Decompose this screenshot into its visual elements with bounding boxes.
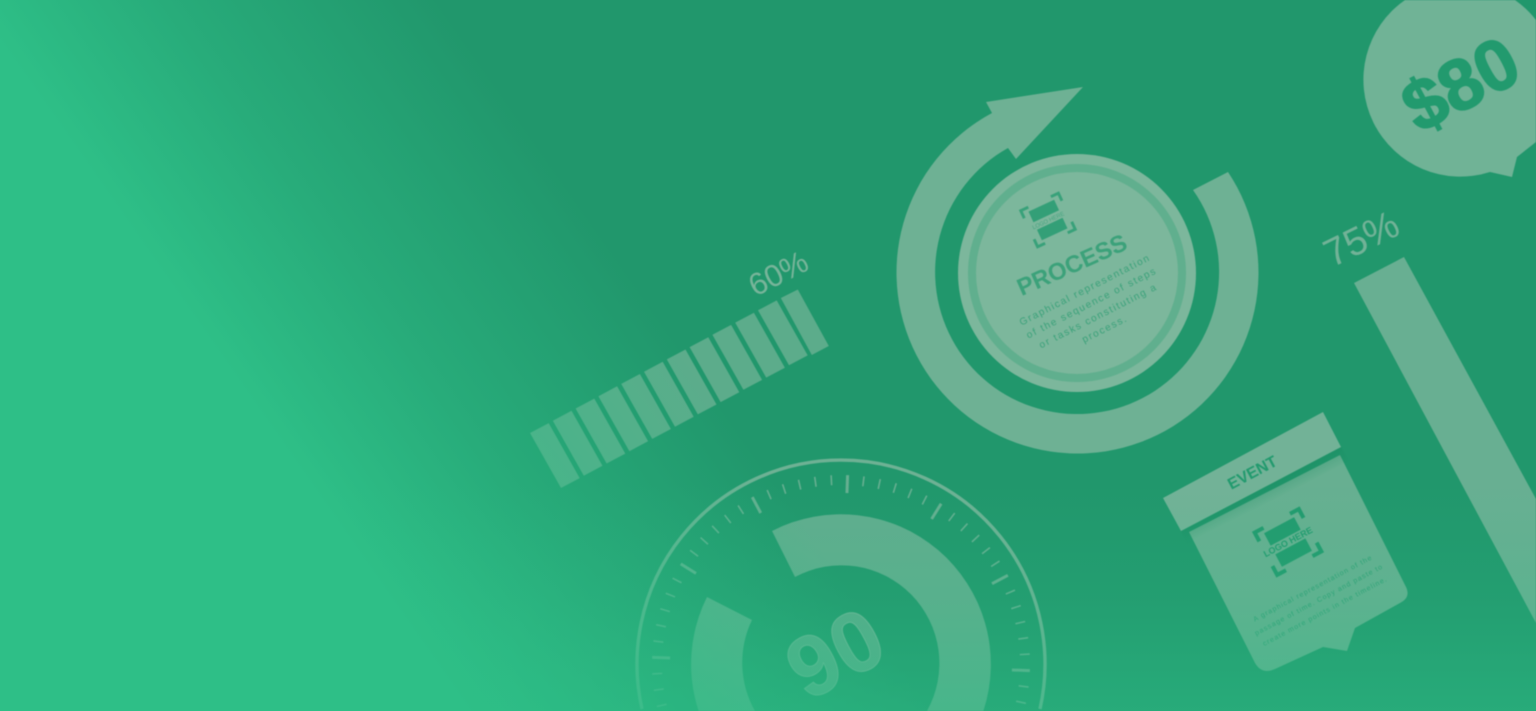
process description: process. xyxy=(1080,313,1130,346)
process description: or tasks constituting a xyxy=(1038,282,1159,351)
label: 60%: 60% xyxy=(743,244,814,303)
icon: event logo: LOGO HERE xyxy=(1262,525,1314,559)
icon: process logo: LOGO HERE xyxy=(1032,211,1066,231)
event description: passage of time. Copy and paste to xyxy=(1254,564,1385,637)
event description: A graphical representation of the xyxy=(1252,554,1374,623)
event description: create more points in the timeline. xyxy=(1262,576,1389,648)
icon: process logo xyxy=(1021,193,1075,247)
gauge dial xyxy=(637,460,1045,711)
header shadow xyxy=(1181,447,1348,545)
gauge minor and major ticks xyxy=(652,475,1030,707)
gauge value arc xyxy=(691,514,991,711)
icon: event logo xyxy=(1253,508,1323,576)
process description: Graphical representation xyxy=(1018,253,1153,328)
card header xyxy=(1163,412,1341,531)
price bubble xyxy=(1363,0,1536,177)
event description xyxy=(1248,552,1391,649)
process circle xyxy=(958,154,1196,392)
card body xyxy=(1189,455,1408,671)
process description: of the sequence of steps xyxy=(1025,266,1159,341)
event card xyxy=(1163,412,1408,671)
heading: EVENT: EVENT xyxy=(1225,453,1280,493)
segmented progress bar 60% xyxy=(530,290,829,488)
label: 75%: 75% xyxy=(1317,203,1406,276)
gauge outer ring xyxy=(637,460,1045,709)
circular process arrow xyxy=(896,87,1258,454)
heading: PROCESS: PROCESS xyxy=(1013,229,1131,302)
process description xyxy=(1018,253,1172,367)
price: $80: $80 xyxy=(1389,21,1533,149)
tall progress bar 75% xyxy=(1354,257,1536,623)
